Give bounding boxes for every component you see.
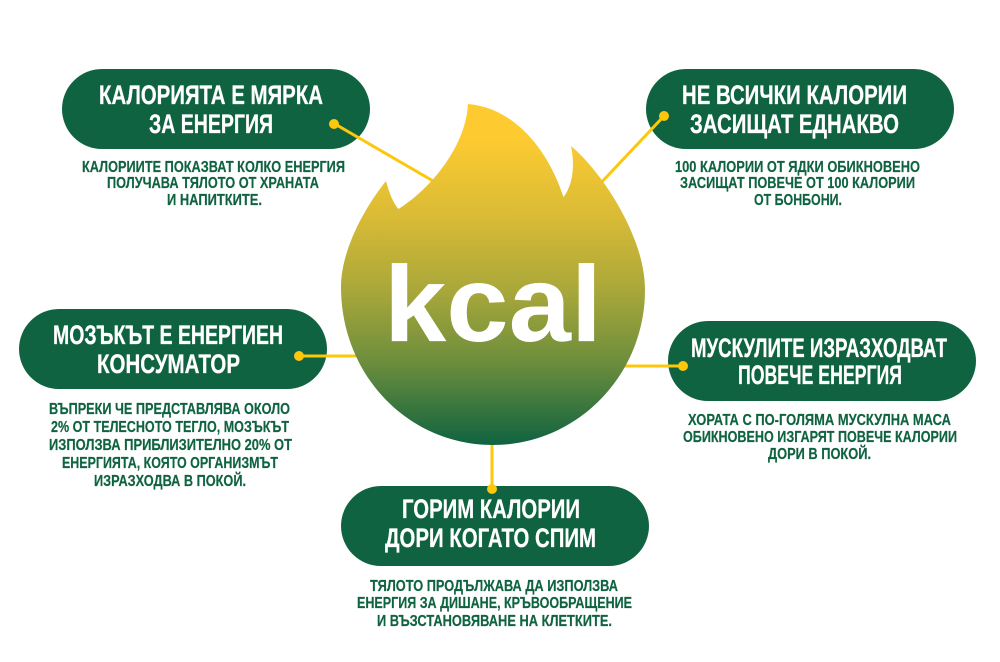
- panel: we burn calories even when sleeping: [341, 440, 649, 630]
- text block: satiety description: ОТ БОНБОНИ.: [754, 192, 842, 209]
- heading: we burn calories even when sleeping: [385, 494, 596, 553]
- heading: the brain is an energy consumer: КОНСУМАТОР: [97, 349, 240, 379]
- text block: sleep description: И ВЪЗСТАНОВЯВАНЕ НА КЛЕТКИТЕ.: [377, 613, 612, 630]
- text block: brain description: ИЗРАЗХОДВА В ПОКОЙ.: [94, 471, 246, 490]
- connector: sleep to flame: [487, 440, 497, 494]
- connector: muscles to flame: [620, 361, 688, 371]
- text block: sleep description: ЕНЕРГИЯ ЗА ДИШАНЕ, КРЪВООБРАЩЕНИЕ: [357, 595, 632, 612]
- text block: muscles description: ДОРИ В ПОКОЙ.: [768, 444, 871, 463]
- text block: calorie description: ПОЛУЧАВА ТЯЛОТО ОТ ХРАНАТА: [107, 175, 319, 192]
- connector: satiety to flame: [598, 111, 669, 186]
- text block: satiety description: 100 КАЛОРИИ ОТ ЯДКИ ОБИКНОВЕНО: [675, 159, 920, 176]
- heading: calorie is a measure of energy: [99, 80, 323, 139]
- heading: we burn calories even when sleeping: ДОРИ КОГАТО СПИМ: [385, 523, 596, 553]
- text block: muscles description: [683, 412, 957, 463]
- heading: not all calories satiate equally: [682, 80, 907, 139]
- text block: calorie description: [82, 159, 345, 209]
- connector: brain to flame: [294, 351, 362, 361]
- heading: muscles use more energy: [691, 333, 947, 390]
- heading: not all calories satiate equally: ЗАСИЩАТ ЕДНАКВО: [690, 109, 899, 139]
- pill: brain heading: [19, 309, 327, 389]
- connector: calorie to flame: [329, 119, 440, 185]
- text block: calorie description: КАЛОРИИТЕ ПОКАЗВАТ КОЛКО ЕНЕРГИЯ: [82, 159, 345, 176]
- pill: calorie heading: [62, 69, 370, 149]
- heading: the brain is an energy consumer: [53, 320, 283, 379]
- heading: not all calories satiate equally: НЕ ВСИЧКИ КАЛОРИИ: [682, 80, 907, 110]
- text block: brain description: ВЪПРЕКИ ЧЕ ПРЕДСТАВЛЯВА ОКОЛО: [49, 401, 290, 418]
- panel: calorie is a measure of energy: [62, 69, 440, 209]
- text block: sleep description: ТЯЛОТО ПРОДЪЛЖАВА ДА ИЗПОЛЗВА: [370, 578, 618, 595]
- heading: muscles use more energy: ПОВЕЧЕ ЕНЕРГИЯ: [738, 360, 902, 390]
- text block: brain description: 2% ОТ ТЕЛЕСНОТО ТЕГЛО, МОЗЪКЪТ: [51, 419, 289, 436]
- pill: muscles heading: [668, 321, 976, 401]
- heading: calorie is a measure of energy: КАЛОРИЯТА Е МЯРКА: [99, 80, 323, 110]
- icon: kcal flame: [341, 104, 645, 445]
- heading: the brain is an energy consumer: МОЗЪКЪТ Е ЕНЕРГИЕН: [53, 320, 283, 350]
- panel: the brain is an energy consumer: [19, 309, 362, 490]
- panel: not all calories satiate equally: [598, 69, 954, 209]
- pill: satiety heading: [646, 69, 954, 149]
- heading: calorie is a measure of energy: ЗА ЕНЕРГИЯ: [149, 109, 273, 139]
- panel: muscles use more energy: [620, 321, 976, 463]
- text block: sleep description: [357, 578, 632, 630]
- text block: brain description: [49, 401, 292, 490]
- text block: satiety description: [675, 159, 920, 209]
- text block: brain description: ЕНЕРГИЯТА, КОЯТО ОРГАНИЗМЪТ: [62, 455, 278, 472]
- text block: satiety description: ЗАСИЩАТ ПОВЕЧЕ ОТ 100 КАЛОРИИ: [680, 175, 915, 192]
- pill: sleep heading: [341, 486, 649, 566]
- text block: brain description: ИЗПОЛЗВА ПРИБЛИЗИТЕЛНО 20% ОТ: [49, 437, 292, 454]
- label: kcal: kcal: [384, 243, 602, 364]
- heading: we burn calories even when sleeping: ГОРИМ КАЛОРИИ: [402, 494, 580, 524]
- text block: calorie description: И НАПИТКИТЕ.: [167, 192, 262, 209]
